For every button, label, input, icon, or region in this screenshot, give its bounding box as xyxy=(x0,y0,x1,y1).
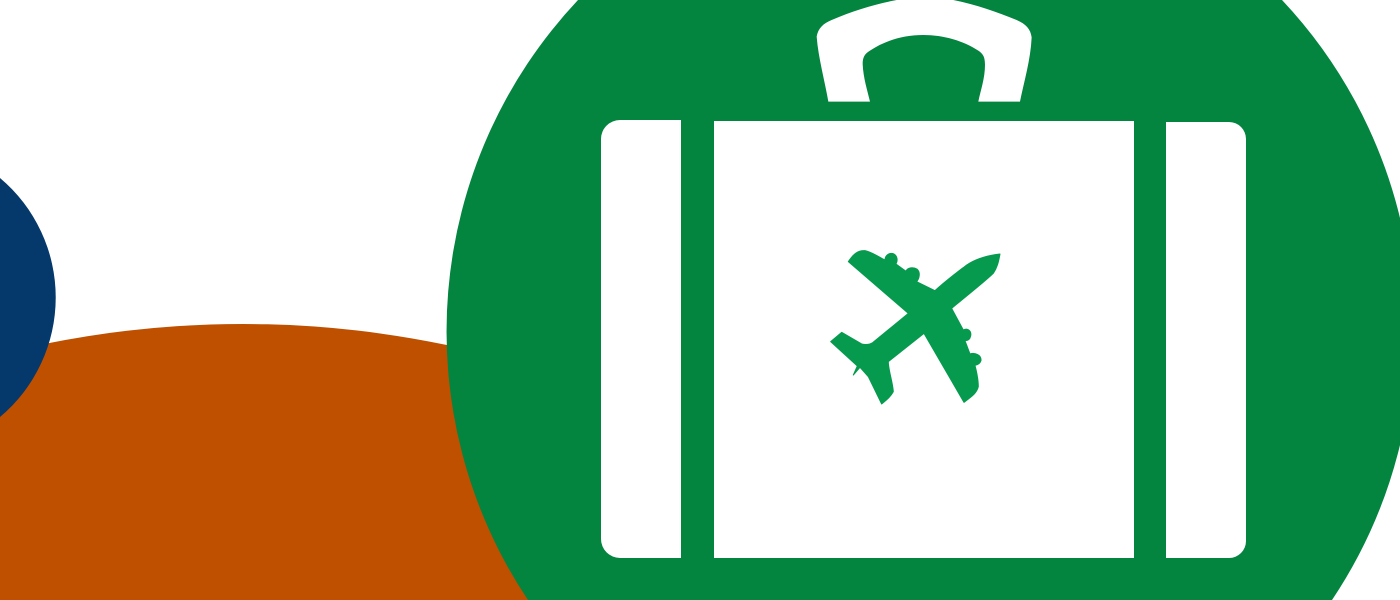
circle: green badge xyxy=(447,0,1400,600)
suitcase left panel xyxy=(601,120,681,558)
suitcase centre panel xyxy=(714,121,1134,558)
icon: airplane xyxy=(831,251,1000,404)
circle: navy background xyxy=(0,178,56,417)
suitcase right panel xyxy=(1166,122,1246,558)
circle: orange background xyxy=(0,324,700,600)
suitcase handle xyxy=(817,0,1032,102)
icon: suitcase xyxy=(601,0,1246,558)
